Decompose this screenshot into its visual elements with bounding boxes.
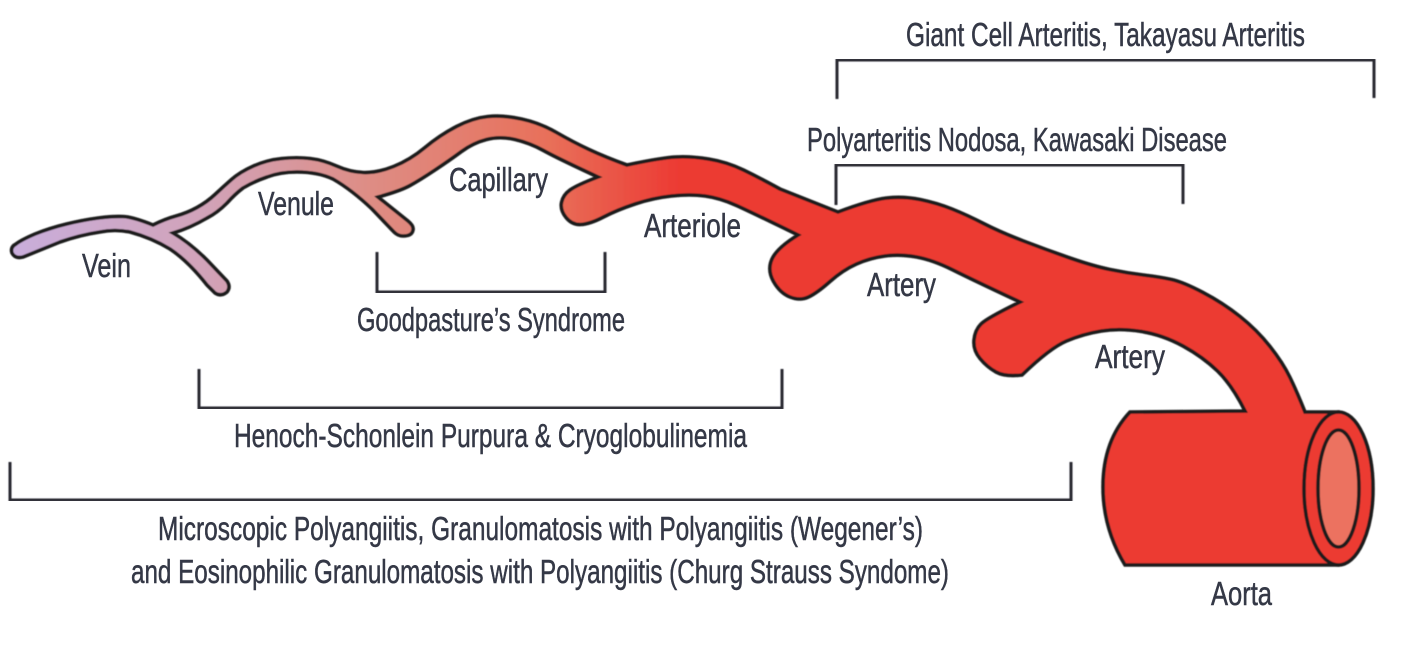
heading: medium vessel diseases: Polyarteritis Nodosa, Kawasaki Disease xyxy=(807,121,1227,158)
bracket: microscopic polyangiitis xyxy=(10,462,1071,500)
bracket: polyarteritis nodosa xyxy=(836,165,1183,205)
label: goodpasture's syndrome: Goodpasture’s Syndrome xyxy=(357,301,625,338)
aorta lumen xyxy=(1318,430,1359,547)
bracket: giant cell arteritis xyxy=(837,60,1374,99)
bracket: henoch-schonlein purpura xyxy=(199,369,782,408)
aorta opening outer ring xyxy=(1304,412,1373,565)
label: artery large: Artery xyxy=(1095,338,1165,375)
label: polyangiitis diseases: Microscopic Polyangiitis, Granulomatosis with Polyangiitis (Wegener’s) xyxy=(158,510,923,547)
label: capillary: Capillary xyxy=(449,161,548,198)
label: venule: Venule xyxy=(258,185,334,222)
label: henoch-schonlein purpura: Henoch-Schonlein Purpura & Cryoglobulinemia xyxy=(234,417,747,454)
label: arteriole: Arteriole xyxy=(644,207,741,244)
label: aorta: Aorta xyxy=(1211,575,1272,612)
label: artery small: Artery xyxy=(867,266,936,303)
bracket: goodpasture's syndrome xyxy=(377,252,605,292)
label: vein: Vein xyxy=(82,247,131,284)
label: polyangiitis diseases: and Eosinophilic Granulomatosis with Polyangiitis (Churg Strauss Syndome) xyxy=(131,553,949,590)
vessel tree from vein to aorta xyxy=(12,116,1373,565)
